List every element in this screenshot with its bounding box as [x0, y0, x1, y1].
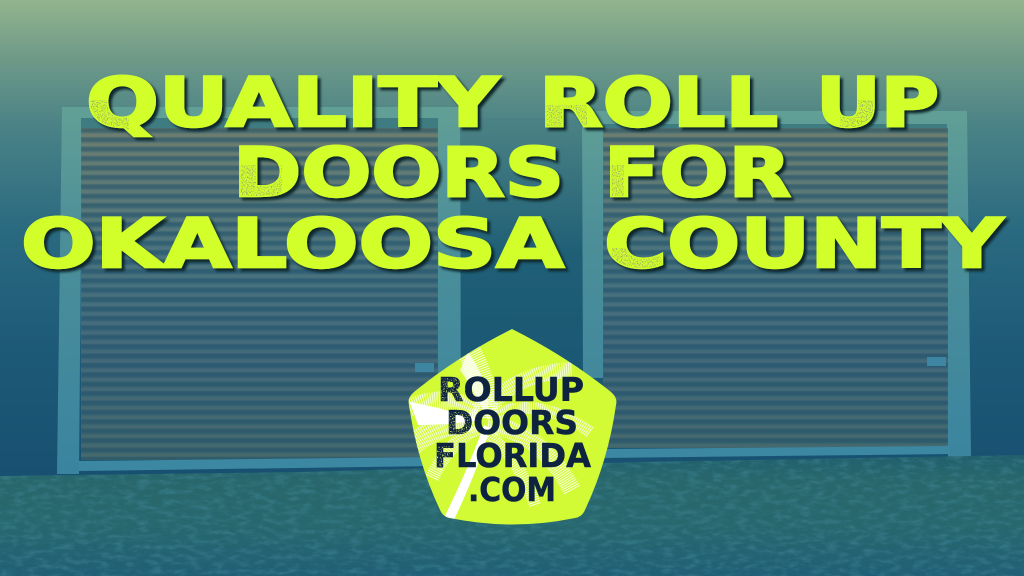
logo text: ROLLUP — [438, 371, 584, 409]
right door latch — [927, 357, 946, 366]
logo text distress texture — [436, 378, 470, 468]
panel: grass — [0, 450, 1024, 576]
title line 3: OKALOOSA — [21, 205, 564, 284]
logo text: FLORIDA — [434, 437, 591, 475]
recess above right door — [603, 124, 947, 131]
logo badge — [409, 329, 616, 524]
logo text — [434, 371, 591, 509]
right door bottom rail — [603, 446, 950, 458]
title line 1 — [86, 64, 939, 143]
panel: gap between doors — [461, 118, 583, 459]
title line 3 — [21, 205, 1004, 284]
title — [21, 64, 1004, 284]
left door slats — [81, 128, 438, 460]
logo text: DOORS — [446, 404, 578, 442]
left door bottom rail — [79, 457, 438, 471]
icon: palm tree — [409, 350, 590, 524]
title line 2: FOR — [604, 134, 791, 213]
title line 2 — [233, 134, 791, 213]
door frame left — [57, 107, 461, 474]
badge shape — [409, 329, 616, 524]
door frame right — [582, 111, 971, 458]
title line 3: COUNTY — [604, 205, 1004, 284]
right door slats — [603, 128, 948, 448]
left door latch — [415, 363, 434, 372]
title line 1: ROLL — [539, 64, 778, 143]
panel: right roll up door — [582, 111, 971, 458]
title line 2: DOORS — [233, 134, 564, 213]
title distress texture — [84, 100, 885, 269]
panel: left roll up door — [57, 107, 461, 474]
title line 1: UP — [816, 64, 939, 143]
logo text: .COM — [468, 471, 556, 509]
title line 1: QUALITY — [86, 64, 500, 143]
recess above left door — [81, 118, 438, 130]
